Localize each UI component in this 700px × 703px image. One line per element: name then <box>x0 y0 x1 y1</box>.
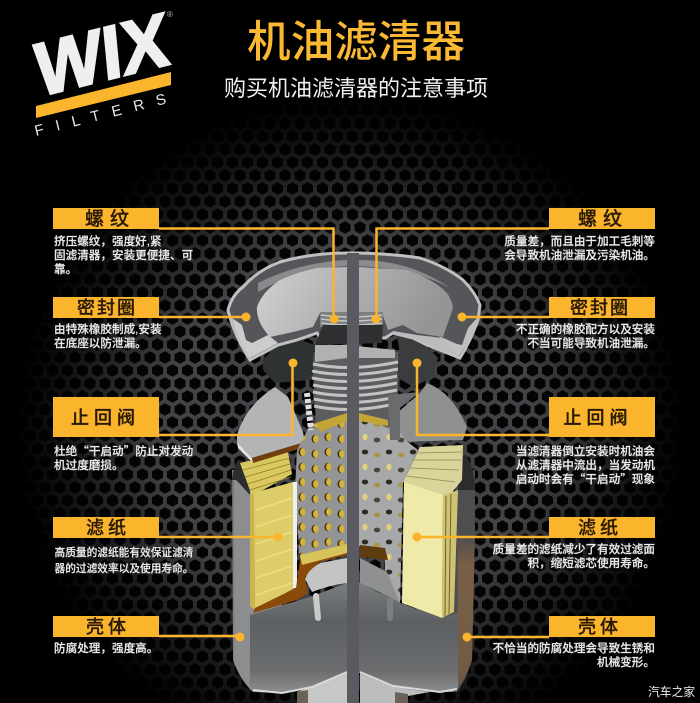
panel: right thread <box>504 208 655 262</box>
background: black with honeycomb mesh <box>35 115 665 703</box>
panel: left thread: 螺纹 <box>85 208 135 230</box>
panel: right shell <box>493 616 655 669</box>
logo: WIX Filters <box>31 0 180 140</box>
bowl thread feet right <box>387 600 393 618</box>
inner bowl right <box>360 558 400 603</box>
callout: left shell <box>159 632 244 642</box>
valve blob right <box>397 337 438 387</box>
right filter pleats <box>403 445 463 500</box>
inner bowl left <box>305 558 347 592</box>
panel: left valve <box>53 397 193 472</box>
left wall dark arc <box>232 460 250 495</box>
valve blob left <box>263 340 315 383</box>
panel: left seal <box>53 297 162 350</box>
panel: right valve: 止回阀 <box>564 408 632 428</box>
logo registered mark: ® <box>167 10 173 19</box>
panel: left shell <box>53 616 159 655</box>
watermark: 汽车之家 <box>648 685 695 699</box>
title: 机油滤清器 <box>247 19 465 67</box>
callout: right seal <box>458 312 549 322</box>
bottom lip <box>253 672 457 693</box>
panel: left shell: 防腐处理，强度高。 <box>54 641 158 655</box>
cap top light band <box>258 260 450 292</box>
panel: right valve: 从滤清器中流出，当发动机 <box>516 458 655 472</box>
panel: right valve <box>516 397 655 487</box>
center divider bar <box>347 253 359 703</box>
right bracket <box>388 392 420 440</box>
panel: right paper <box>493 517 655 570</box>
panel: left paper <box>53 517 194 575</box>
cap lower lip left <box>232 318 278 358</box>
callout: right shell <box>462 632 549 642</box>
panel: left thread <box>53 208 194 276</box>
bottom nut plate left <box>297 673 347 703</box>
panel: right shell: 机械变形。 <box>597 655 655 669</box>
logo yellow bar <box>36 72 171 118</box>
callout: left paper <box>159 532 282 542</box>
panel: left shell: 壳体 <box>86 617 130 637</box>
gold pleat ring on tube <box>316 413 388 432</box>
panel: left valve: 止回阀 <box>71 408 140 428</box>
panel: left paper: 器的过滤效率以及使用寿命。 <box>54 562 193 575</box>
panel: right paper: 质量差的滤纸减少了有效过滤面 <box>493 542 655 556</box>
cap lower lip right <box>427 318 477 356</box>
callout: left valve <box>159 358 298 435</box>
panel: right seal <box>516 297 655 350</box>
right wall dark arc <box>458 455 475 490</box>
panel: left valve: 杜绝“干启动”防止对发动 <box>54 443 193 459</box>
central thread stem <box>312 345 398 428</box>
hub dark core <box>315 325 383 345</box>
panel: left seal: 密封圈 <box>77 298 137 318</box>
callout: right paper <box>412 532 549 542</box>
left top lid <box>237 387 305 458</box>
canister left wall <box>232 470 282 693</box>
threaded hub <box>320 312 383 327</box>
panel: right seal: 不当可能导致机油泄漏。 <box>527 336 655 350</box>
rusty right wall <box>457 535 475 688</box>
cutaway oil filter illustration <box>228 253 480 703</box>
right top lid <box>397 383 467 442</box>
center perforated tube right <box>359 413 418 603</box>
right filter paper <box>402 482 458 618</box>
callout: right thread <box>372 228 549 324</box>
subtitle: 购买机油滤清器的注意事项 <box>224 76 488 101</box>
canister interior lower <box>250 583 458 693</box>
callout: left seal <box>159 312 250 322</box>
panel: left thread: 挤压螺纹，强度好,紧 <box>54 234 162 248</box>
canister right wall <box>440 470 475 692</box>
panel: right thread: 质量差，而且由于加工毛刺等 <box>504 234 655 248</box>
panel: right thread: 螺纹 <box>578 208 628 230</box>
callout: right valve <box>412 358 549 435</box>
left filter pleats <box>240 452 292 496</box>
left lid white edge <box>237 442 253 463</box>
panel: right seal: 不正确的橡胶配方以及安装 <box>516 322 655 336</box>
logo tagline: FILTERS <box>33 88 180 140</box>
left filter paper <box>250 482 297 610</box>
left brown lid edge <box>252 442 305 463</box>
brown end cap <box>253 548 347 613</box>
cap outer ring <box>228 253 480 360</box>
panel: right seal: 密封圈 <box>570 298 630 318</box>
panel: right valve: 当滤清器倒立安装时机油会 <box>516 444 655 458</box>
thread teeth left <box>307 393 311 430</box>
right inner brown <box>360 545 388 560</box>
panel: right shell: 不恰当的防腐处理会导致生锈和 <box>493 641 655 655</box>
cap plate inner face <box>257 267 453 337</box>
bottom nut dark edges <box>297 690 408 703</box>
panel: left thread: 靠。 <box>54 262 77 276</box>
panel: left paper: 高质量的滤纸能有效保证滤清 <box>54 546 194 559</box>
panel: left paper: 滤纸 <box>86 518 130 538</box>
panel: left thread: 固滤清器，安装更便捷、可 <box>54 248 194 262</box>
panel: left seal: 由特殊橡胶制成,安装 <box>54 322 162 336</box>
panel: right paper: 滤纸 <box>578 518 622 538</box>
callout: left thread <box>159 228 338 324</box>
pleat serration bottom <box>300 544 347 565</box>
panel: right paper: 积，缩短滤芯使用寿命。 <box>527 556 655 570</box>
panel: right valve: 启动时会有“干启动”现象 <box>516 471 655 487</box>
cap lower band right <box>393 331 458 356</box>
panel: right thread: 会导致机油泄漏及污染机油。 <box>504 248 655 262</box>
panel: right shell: 壳体 <box>578 617 622 637</box>
bowl thread feet <box>316 596 318 618</box>
bottom nut plate right <box>360 673 430 703</box>
center perforated tube left <box>295 413 347 562</box>
panel: left seal: 在底座以防泄漏。 <box>54 336 147 350</box>
panel: left valve: 机过度磨损。 <box>54 458 124 472</box>
